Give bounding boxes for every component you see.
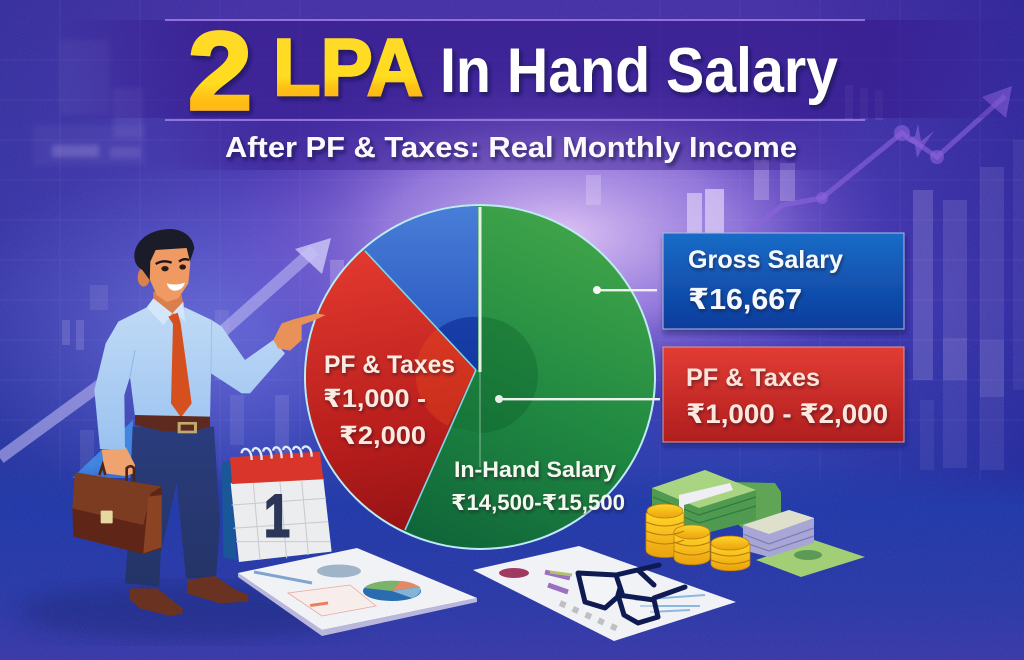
callout: PF and taxes: ₹1,000 - ₹2,000	[686, 399, 888, 429]
pointing hand	[273, 313, 326, 351]
background chart faint, top left	[33, 40, 145, 165]
briefcase	[72, 465, 162, 554]
shoes	[130, 576, 248, 616]
callout: PF and taxes	[663, 347, 904, 442]
pie label: PF and taxes	[323, 351, 455, 450]
pants	[125, 427, 220, 587]
pie label: in-hand salary: ₹14,500-₹15,500	[451, 490, 625, 515]
subtitle: After PF & Taxes: Real Monthly Income	[225, 132, 797, 164]
banknote stack back	[732, 482, 781, 530]
slice: PF and taxes	[306, 250, 475, 530]
glasses	[578, 565, 685, 623]
title	[188, 10, 838, 133]
callout: gross salary: Gross Salary	[688, 246, 843, 274]
grey stack	[743, 510, 814, 557]
callout: gross salary	[663, 233, 904, 329]
illustration: document and glasses	[473, 546, 736, 641]
banknote stack	[652, 470, 756, 535]
connector: gross salary	[593, 286, 657, 294]
coins	[646, 504, 750, 571]
banknote flat	[756, 540, 865, 577]
pie label: PF and taxes: PF & Taxes	[324, 351, 455, 379]
title: LPA	[273, 23, 423, 113]
slice: in-hand salary	[300, 200, 660, 550]
title band	[60, 19, 1024, 170]
upper body	[94, 229, 326, 449]
background bars	[62, 85, 1024, 490]
illustration: report paper with pie	[238, 548, 477, 636]
hand	[102, 447, 135, 476]
background arrow left	[0, 238, 331, 478]
tie	[168, 313, 192, 417]
pie label: PF and taxes: ₹1,000 -	[323, 385, 426, 413]
pie chart	[290, 200, 660, 560]
collar	[147, 298, 185, 325]
title: 2	[188, 10, 252, 133]
belt	[135, 415, 210, 433]
pie label: PF and taxes: ₹2,000	[339, 422, 426, 450]
illustration: money and coins	[646, 470, 865, 577]
pie label: in-hand salary	[451, 457, 625, 515]
title: In Hand Salary	[440, 36, 838, 106]
connector: PF and taxes	[495, 395, 660, 403]
callout: gross salary: ₹16,667	[688, 284, 802, 316]
pie label: in-hand salary: In-Hand Salary	[454, 457, 617, 482]
legs and briefcase	[72, 427, 248, 616]
background arrow right	[750, 86, 1012, 230]
small pie	[363, 581, 421, 601]
illustration: man	[72, 229, 326, 616]
shirt	[94, 307, 285, 449]
slice: blue	[364, 206, 478, 370]
illustration: calendar: 1	[264, 483, 290, 550]
callout: PF and taxes: PF & Taxes	[686, 364, 820, 392]
illustration: calendar	[222, 446, 332, 562]
head	[134, 229, 194, 316]
